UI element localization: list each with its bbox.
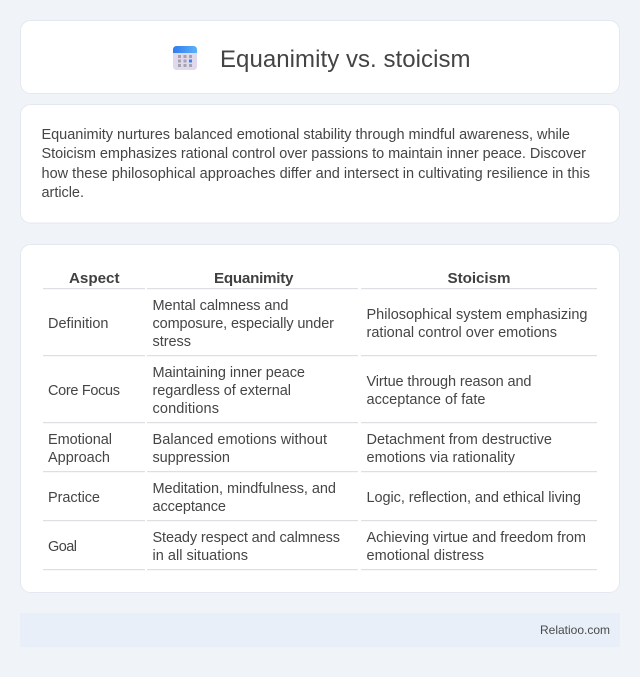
title: Equanimity vs. stoicism <box>220 46 470 73</box>
panel: introduction <box>20 104 620 223</box>
row: practice: Meditation, mindfulness, and <box>152 481 336 497</box>
row: emotional approach: Approach <box>48 450 110 466</box>
row: goal: Goal <box>48 539 77 555</box>
row: definition: stress <box>152 334 191 350</box>
row: core focus: conditions <box>152 401 219 417</box>
row: definition: Mental calmness and <box>152 298 288 314</box>
text block: introduction: how these philosophical approaches differ and intersect in cultivating resilience in this <box>42 166 590 182</box>
text block: introduction: article. <box>42 185 84 201</box>
row: core focus: Maintaining inner peace <box>152 365 305 381</box>
row: emotional approach <box>43 432 597 472</box>
text block: introduction <box>42 127 590 201</box>
row: practice: Logic, reflection, and ethical living <box>366 490 581 506</box>
table header: Aspect <box>69 270 120 287</box>
row: definition: composure, especially under <box>152 316 334 332</box>
row: practice <box>43 481 597 521</box>
row: definition: Philosophical system emphasizing <box>366 307 588 323</box>
row: practice: acceptance <box>152 499 226 515</box>
row: emotional approach: emotions via rationality <box>366 450 516 466</box>
table header: Stoicism <box>448 270 510 287</box>
row: emotional approach: Balanced emotions without <box>152 432 327 448</box>
icon: calendar <box>173 46 197 70</box>
table header: Equanimity <box>214 270 294 287</box>
row: core focus: acceptance of fate <box>366 392 486 408</box>
row: core focus: Core Focus <box>48 383 120 399</box>
panel: title card <box>20 20 620 94</box>
row: goal: in all situations <box>152 548 248 564</box>
row: goal: Achieving virtue and freedom from <box>366 530 586 546</box>
row: goal: emotional distress <box>366 548 484 564</box>
text block: introduction: Equanimity nurtures balanced emotional stability through mindful awareness, while <box>42 127 570 143</box>
footer brand: Relatioo.com <box>540 623 610 637</box>
row: goal: Steady respect and calmness <box>152 530 340 546</box>
row: emotional approach: Emotional <box>48 432 112 448</box>
row: goal <box>43 530 597 570</box>
row: definition <box>43 298 597 356</box>
row: definition: Definition <box>48 316 108 332</box>
panel: comparison table <box>20 244 620 592</box>
row: practice: Practice <box>48 490 100 506</box>
row: definition: rational control over emotions <box>366 325 557 341</box>
row: emotional approach: Detachment from destructive <box>366 432 552 448</box>
row: core focus: Virtue through reason and <box>366 374 532 390</box>
row: emotional approach: suppression <box>152 450 230 466</box>
row: core focus: regardless of external <box>152 383 291 399</box>
row: core focus <box>43 365 597 423</box>
footer <box>20 613 620 647</box>
table header <box>43 270 597 289</box>
text block: introduction: Stoicism emphasizes rational control over passions to maintain inner peace. Discover <box>42 146 586 162</box>
